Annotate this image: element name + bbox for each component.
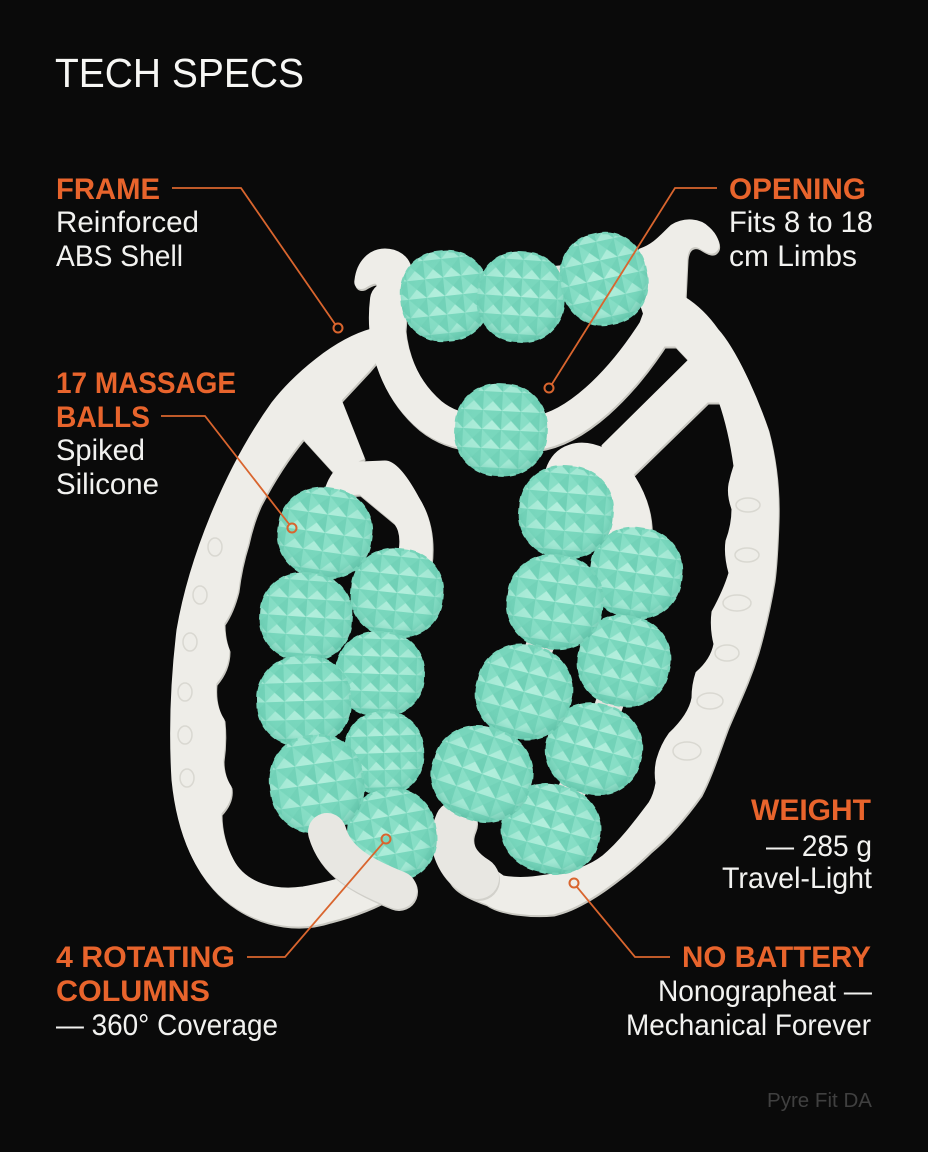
right lower tube	[452, 822, 479, 880]
callout: weight: WEIGHT	[751, 794, 871, 827]
callout: weight: — 285 g	[766, 830, 872, 863]
callout: massage balls: BALLS	[56, 401, 150, 434]
frame grip dimples	[178, 498, 760, 787]
watermark: Pyre Fit DA	[767, 1090, 873, 1112]
centre massage ball	[453, 382, 549, 478]
left inner column balls	[334, 544, 447, 888]
callout: rotating columns: 4 ROTATING	[56, 941, 235, 974]
callout: rotating columns: COLUMNS	[56, 975, 210, 1008]
callout: opening: Fits 8 to 18	[729, 206, 873, 239]
callout: no battery	[570, 878, 872, 1042]
left lower tube	[327, 832, 399, 892]
callout: rotating columns	[56, 834, 390, 1042]
callout: no battery: NO BATTERY	[682, 941, 871, 974]
callout: frame: FRAME	[56, 173, 160, 206]
callout: no battery: Mechanical Forever	[626, 1009, 871, 1042]
callout: massage balls: 17 MASSAGE	[56, 367, 236, 400]
title: TECH SPECS	[55, 50, 304, 96]
callout: opening: OPENING	[729, 173, 866, 206]
left outer column balls	[256, 482, 378, 839]
callout: weight	[722, 794, 872, 895]
callout: opening	[544, 173, 873, 392]
white frame	[172, 221, 778, 927]
callout: no battery: Nonographeat —	[658, 975, 872, 1008]
right inner column balls	[493, 522, 688, 884]
top massage balls	[396, 225, 656, 345]
callout: massage balls: Silicone	[56, 468, 159, 501]
callout: massage balls: Spiked	[56, 434, 145, 467]
callout: frame: Reinforced	[56, 206, 199, 239]
callout: opening: cm Limbs	[729, 240, 857, 273]
callout: weight: Travel-Light	[722, 862, 872, 895]
callout: massage balls	[56, 367, 296, 532]
callout: frame	[56, 173, 342, 332]
callout: frame: ABS Shell	[56, 240, 183, 273]
column spindles	[304, 279, 636, 835]
massager product illustration	[172, 221, 778, 927]
right outer column balls	[420, 462, 617, 834]
callout: rotating columns: — 360° Coverage	[56, 1009, 278, 1042]
